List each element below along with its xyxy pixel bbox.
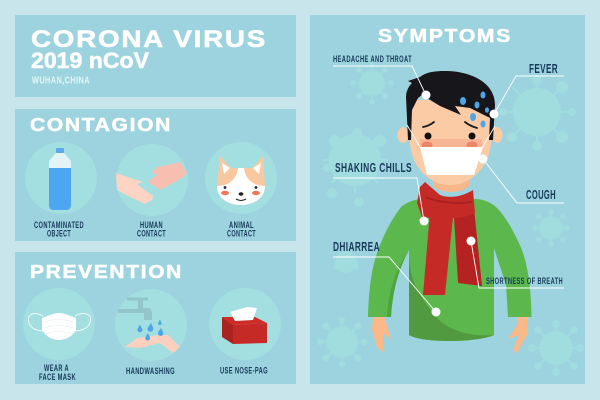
label: handwashing: HANDWASHING (126, 366, 175, 377)
subheading: 2019 nCoV: 2019 nCoV (31, 48, 149, 73)
label: fever: FEVER (529, 61, 558, 76)
ears (398, 127, 502, 143)
label: contaminated object: OBJECT (47, 228, 71, 240)
label: wear a face mask (39, 363, 76, 383)
icon: water bottle (25, 142, 97, 214)
label: cough: COUGH (526, 187, 556, 202)
panel: contagion (15, 109, 296, 241)
panel: symptoms (310, 15, 585, 384)
red scarf (417, 182, 482, 295)
icon: handwashing (115, 289, 187, 361)
heading: symptoms: SYMPTOMS (378, 25, 512, 46)
label: headache and throat: HEADACHE AND THROAT (333, 54, 412, 64)
label: animal contact (227, 220, 256, 240)
green sweater (368, 199, 532, 341)
eyes (424, 132, 476, 140)
label: use nose-pag: USE NOSE-PAG (220, 366, 268, 376)
hair (406, 71, 495, 140)
heading: corona virus: CORONA VIRUS (31, 26, 267, 53)
label: human contact (137, 220, 166, 240)
label: contaminated object: CONTAMINATED (34, 220, 84, 231)
neck (433, 170, 469, 192)
panel: prevention (15, 252, 296, 384)
location text: WUHAN,CHINA (32, 74, 90, 86)
fever flush (420, 139, 482, 148)
icon: face mask (23, 288, 95, 360)
character hands (372, 316, 528, 353)
heading: prevention: PREVENTION (30, 261, 183, 282)
icon: animal contact dog (205, 142, 277, 214)
label: animal contact: CONTACT (227, 228, 256, 240)
label: contaminated object (34, 220, 84, 240)
background virus icons (318, 62, 583, 375)
icon: human contact hands (116, 144, 188, 216)
eyebrows (423, 122, 477, 128)
callout dots (420, 90, 498, 316)
label: human contact: HUMAN (140, 220, 163, 231)
callout lines (333, 66, 564, 312)
character illustration (368, 71, 532, 353)
label: wear a face mask: WEAR A (44, 363, 69, 374)
label: wear a face mask: FACE MASK (39, 372, 76, 383)
icon: tissue box (209, 288, 281, 360)
label: animal contact: ANIMAL (229, 220, 254, 231)
heading: contagion: CONTAGION (30, 114, 172, 135)
face (410, 100, 491, 185)
face mask (420, 147, 483, 175)
sweat drops (460, 92, 489, 128)
label: shaking chills: SHAKING CHILLS (335, 161, 412, 175)
panel: title (15, 15, 296, 97)
label: dhiarrea: DHIARREA (333, 239, 380, 254)
cheeks (422, 142, 478, 148)
label: human contact: CONTACT (137, 228, 166, 240)
